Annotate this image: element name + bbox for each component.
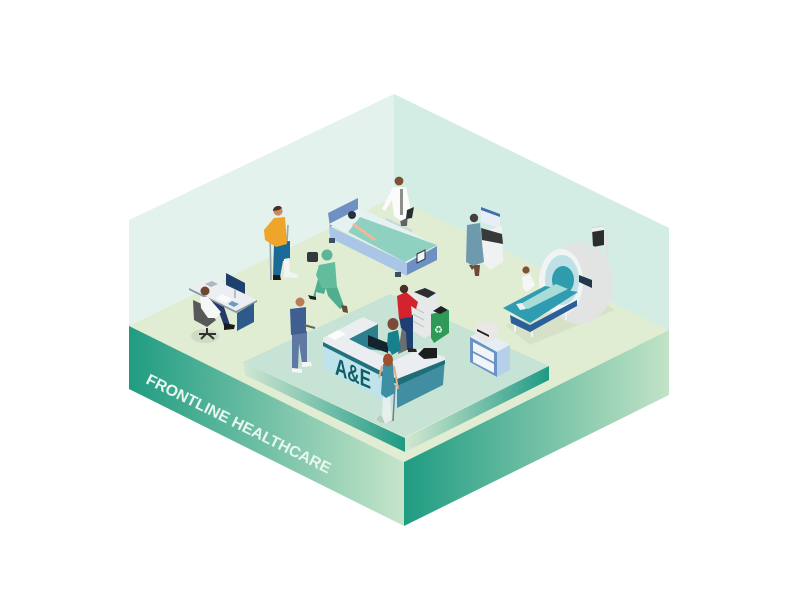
desk top [189,276,257,311]
shadow [505,300,615,345]
raised A&E platform [243,294,549,452]
A&E sign: A&E [335,353,371,395]
desk side panel [237,303,254,331]
reception desk [323,317,445,408]
left base face [129,326,404,526]
seated receptionist [387,318,407,355]
front panel band [323,340,397,384]
blanket [348,217,437,262]
bed frame side [329,226,407,276]
computer desk with seated doctor [189,273,257,343]
head [296,298,304,306]
man in red jacket [397,285,418,352]
patient head [348,211,356,219]
sweater [264,217,287,247]
cast [284,258,299,278]
right base face [404,330,669,526]
platform top [243,294,549,437]
male nurse with tablet [290,298,315,373]
bed rail [386,219,412,231]
IV pole [606,233,608,264]
foot board [407,246,437,275]
rear leg [325,284,344,309]
clipboard [406,207,414,219]
monitor [368,335,388,353]
headboard [328,198,358,227]
paper tray [205,281,218,287]
bore rim [545,255,579,305]
trousers [399,212,408,226]
shadow [377,415,393,423]
gown [466,223,484,266]
MRI scanner [503,226,615,345]
IV bag [592,226,604,247]
upper drawer [473,342,494,362]
copier body [412,288,437,338]
scanner panel [579,275,592,288]
chair [398,327,407,354]
table legs [515,314,566,337]
cap [322,250,332,260]
monitor [226,273,245,294]
screen header [481,207,500,217]
inner desk well [349,324,397,352]
MRI technician [522,266,535,292]
white coat [200,297,221,318]
arm and tablet [304,325,315,328]
trousers [399,315,413,350]
patient feet [516,303,526,310]
crutches [270,225,288,280]
chair base [199,328,216,339]
clipboard [417,250,425,263]
arms [379,366,398,389]
shoes [292,368,302,373]
trolley [482,226,503,270]
desk edge [189,288,257,313]
chair shadow [191,329,219,343]
label: frontline healthcare: FRONTLINE HEALTHCARE [143,371,334,477]
cabinet front [470,337,497,377]
printer slot [477,329,489,337]
hospital bed with patient [328,198,437,277]
lower drawer [473,353,494,373]
standing doctor with clipboard [382,177,414,226]
sheet [329,208,437,263]
paper on counter [327,330,346,340]
bin lid [433,306,448,314]
cabinet top [470,330,510,352]
rear shoe [341,305,348,313]
legs [292,331,307,369]
floor [129,197,669,462]
room shell [129,94,669,526]
platform left side [243,362,405,452]
jeans [273,241,290,277]
left wall [129,94,394,327]
mouse pad [228,301,239,307]
head [470,214,478,222]
counter top [323,317,445,379]
cabinet side [497,345,510,377]
hair [383,354,393,366]
monitor stand [234,290,236,298]
scrubs torso [316,262,337,288]
copier [412,288,437,338]
hair [388,318,398,330]
bin body [431,310,449,343]
scanner housing [545,242,613,324]
torso [290,307,306,335]
kneeling surgeon photographer [307,250,348,313]
head [522,266,530,274]
head [273,206,283,216]
black box on counter [418,348,437,359]
front leg [313,279,328,298]
table top [503,286,578,323]
table underside [510,300,577,332]
right wall [394,94,669,332]
coat [522,274,535,292]
platform right side [405,366,549,452]
copier top [414,288,436,298]
recycling bin [431,306,449,343]
shoe [273,275,281,280]
wheels [332,238,398,277]
legs [469,265,480,276]
front ring [539,249,583,315]
trolley screen [481,207,500,228]
keyboard [216,294,232,303]
head [395,177,403,185]
bore [552,266,574,294]
head [400,285,408,293]
front shoe [308,295,316,300]
filing cabinet with printer [470,320,510,377]
head [200,286,210,296]
shoes [224,323,235,330]
woman with crutch [377,354,398,424]
right face [397,358,445,408]
trousers [210,300,230,326]
front panel [323,340,397,408]
second shoe [302,362,312,367]
patient body [517,284,568,309]
recycling marks: ♻ [434,325,443,336]
shoe [408,348,417,352]
leg cast [382,397,392,424]
white coat [382,187,412,221]
patient arm [353,224,375,240]
crutch [393,385,395,421]
dress [381,363,395,398]
jacket [397,292,418,319]
patient with monitor trolley [466,207,503,276]
right face band [397,358,445,386]
camera [307,252,318,262]
copier drawers [413,307,424,327]
shirt [400,189,403,215]
jacket [387,330,401,355]
hair [273,206,282,211]
man on crutches [264,206,299,280]
IV bag top [592,226,604,232]
printer [476,320,499,343]
chair [193,300,216,327]
trolley controls [481,228,503,244]
